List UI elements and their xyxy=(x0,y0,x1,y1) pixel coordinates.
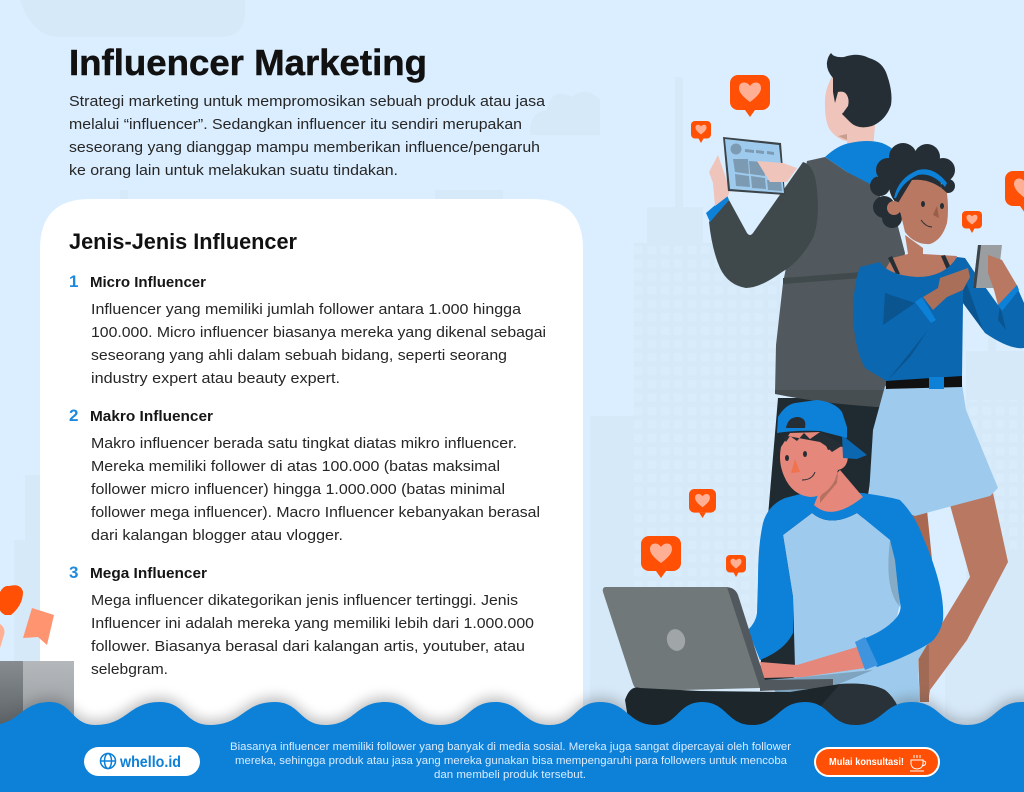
item 1 xyxy=(69,272,546,387)
woman legs xyxy=(912,493,1008,702)
boy shirt sleeves xyxy=(748,491,943,667)
woman lower leg strip xyxy=(918,645,929,702)
boy eyes xyxy=(785,451,807,461)
laptop base xyxy=(760,679,833,691)
woman right leg xyxy=(918,493,1008,702)
item 3 body: Influencer ini adalah mereka yang memiliki lebih dari 1.000.000 xyxy=(91,616,534,632)
footer text: mereka, sehingga produk atau jasa yang mereka gunakan bisa mempengaruhi para followers untuk mencoba xyxy=(235,755,787,767)
skirt xyxy=(869,384,998,516)
eye xyxy=(785,455,789,461)
item 3 xyxy=(69,563,534,678)
man hoodie collar xyxy=(825,141,895,186)
smile xyxy=(921,220,932,227)
number 2: 2 xyxy=(69,406,78,425)
number 1: 1 xyxy=(69,272,78,291)
belt buckle xyxy=(929,377,944,389)
logo pill xyxy=(84,747,200,776)
man neck shadow xyxy=(838,134,847,140)
boy face xyxy=(780,432,848,497)
boy arm xyxy=(760,647,865,678)
man jacket xyxy=(775,157,905,407)
jacket hem xyxy=(775,390,885,407)
boy shirt body xyxy=(783,513,930,712)
pill background xyxy=(84,747,200,776)
woman other hand xyxy=(923,268,970,310)
flag xyxy=(23,608,54,645)
heart bubble large right xyxy=(1005,171,1024,213)
item 1 body: seseorang yang ahli dalam sebuah bidang, seperti seorang xyxy=(91,348,507,364)
woman straps xyxy=(888,255,951,274)
woman cuff left xyxy=(915,297,936,323)
item 1 body: Influencer yang memiliki jumlah follower antara 1.000 hingga xyxy=(91,302,522,318)
panel: types of influencer xyxy=(40,199,583,760)
boy lap shirt shade xyxy=(765,670,873,700)
tablet xyxy=(723,137,785,195)
wave shadow xyxy=(0,697,1024,787)
icon: globe xyxy=(100,754,116,768)
woman face details xyxy=(921,201,944,227)
white card xyxy=(40,199,583,760)
woman cuff right xyxy=(998,285,1019,311)
phone xyxy=(973,245,1002,288)
laptop xyxy=(603,587,833,691)
item 1 body xyxy=(91,302,546,387)
cap xyxy=(777,400,847,438)
boy neck xyxy=(814,470,863,512)
footer text: dan membeli produk tersebut. xyxy=(434,769,586,781)
laptop logo xyxy=(664,627,688,653)
heart bubble medium xyxy=(689,489,716,518)
button background xyxy=(815,748,939,776)
pants left part xyxy=(625,684,900,730)
item 2 title: Makro Influencer xyxy=(90,409,213,425)
sleeve shadow xyxy=(888,540,900,607)
boy pants xyxy=(625,684,900,730)
intro text: seseorang yang dianggap mampu memberikan influence/pengaruh xyxy=(69,139,540,156)
footer wave xyxy=(0,702,1024,792)
man ear xyxy=(836,92,849,113)
boy neck shadow xyxy=(820,473,838,503)
woman illustration xyxy=(853,143,1024,516)
heart bubble small top xyxy=(691,121,711,143)
call to action button xyxy=(815,748,939,776)
icon: coffee cup xyxy=(910,755,926,771)
laptop lid xyxy=(603,587,760,691)
woman neck and chest xyxy=(885,235,957,280)
item 3 body: selebgram. xyxy=(91,662,168,678)
tablet frame xyxy=(723,137,785,195)
item 3 body xyxy=(91,593,534,678)
woman top xyxy=(853,257,1024,382)
item 2 body: follower micro influencer) hingga 1.000.000 (batas minimal xyxy=(91,482,505,498)
hand on phone xyxy=(988,255,1018,305)
block light face xyxy=(23,661,74,726)
man finger xyxy=(757,161,797,182)
boy cuff xyxy=(855,637,878,670)
boy smile xyxy=(802,472,815,480)
heart bubble large top xyxy=(730,75,770,117)
tablet screen xyxy=(725,139,784,193)
pants right part xyxy=(800,684,900,730)
item 1 body: industry expert atau beauty expert. xyxy=(91,371,340,387)
man illustration xyxy=(706,53,905,680)
man hand xyxy=(709,155,730,206)
left floating heart and flag xyxy=(0,585,54,648)
nose xyxy=(933,206,939,218)
item 3 body: Mega influencer dikategorikan jenis influencer tertinggi. Jenis xyxy=(91,593,518,609)
heart bubble large laptop xyxy=(641,536,681,578)
belt xyxy=(886,376,962,389)
man hair xyxy=(827,53,892,127)
tablet avatar xyxy=(730,144,742,154)
cap strap opening xyxy=(786,417,805,428)
heart bubble small laptop xyxy=(726,555,746,577)
man trousers xyxy=(760,398,882,680)
jacket belt xyxy=(783,272,862,284)
woman headband xyxy=(894,169,947,198)
footer text xyxy=(230,741,792,781)
intro text: melalui “influencer”. Sedangkan influencer itu sendiri merupakan xyxy=(69,116,522,133)
other eye xyxy=(803,451,807,457)
boy hair xyxy=(782,432,843,452)
item 2 body: Makro influencer berada satu tingkat diatas mikro influencer. xyxy=(91,436,517,452)
man neck and face xyxy=(825,75,875,150)
top shading xyxy=(883,273,1006,380)
peach shape xyxy=(0,624,4,648)
man sleeve xyxy=(709,162,818,288)
intro text: Strategi marketing untuk mempromosikan sebuah produk atau jasa xyxy=(69,93,546,110)
left rooftop block xyxy=(0,661,74,726)
item 2 body xyxy=(91,436,540,544)
item 1 title: Micro Influencer xyxy=(90,275,206,291)
footer text: Biasanya influencer memiliki follower yang banyak di media sosial. Mereka juga sangat dipercayai oleh follower xyxy=(230,741,792,753)
building windows xyxy=(634,246,780,626)
boy illustration xyxy=(748,400,943,712)
laptop hinge side xyxy=(725,587,765,688)
man cuff xyxy=(706,195,729,222)
woman hair xyxy=(870,143,955,228)
cap brim xyxy=(842,435,867,459)
woman ear xyxy=(887,201,901,215)
block dark face xyxy=(0,661,23,726)
title: Influencer Marketing xyxy=(69,42,427,83)
tablet tiles xyxy=(733,149,782,191)
other eye xyxy=(940,203,944,209)
phone edge xyxy=(973,245,981,288)
intro text xyxy=(69,93,546,179)
item 2 body: dari kalangan blogger atau vlogger. xyxy=(91,528,343,544)
woman left leg xyxy=(912,510,932,560)
item 3 body: follower. Biasanya berasal dari kalangan artis, youtuber, atau xyxy=(91,639,525,655)
panel heading: Jenis-Jenis Influencer xyxy=(69,229,297,254)
item 1 body: 100.000. Micro influencer biasanya mereka yang dikenal sebagai xyxy=(91,325,546,341)
item 2 body: Mereka memiliki follower di atas 100.000 (batas maksimal xyxy=(91,459,500,475)
item 2 xyxy=(69,406,540,544)
item 3 title: Mega Influencer xyxy=(90,566,207,582)
button label: Mulai konsultasi! xyxy=(829,757,904,768)
woman face xyxy=(898,180,948,244)
orange heart xyxy=(0,585,23,615)
number 3: 3 xyxy=(69,563,78,582)
intro text: ke orang lain untuk melakukan suatu tindakan. xyxy=(69,162,398,179)
item 2 body: follower mega influencer). Macro Influencer kebanyakan berasal xyxy=(91,505,540,521)
eye xyxy=(921,201,925,207)
building windows right xyxy=(966,400,1024,550)
heart bubble small near phone xyxy=(962,211,982,233)
logo text: whello.id xyxy=(119,754,181,771)
boy nose xyxy=(791,459,800,473)
